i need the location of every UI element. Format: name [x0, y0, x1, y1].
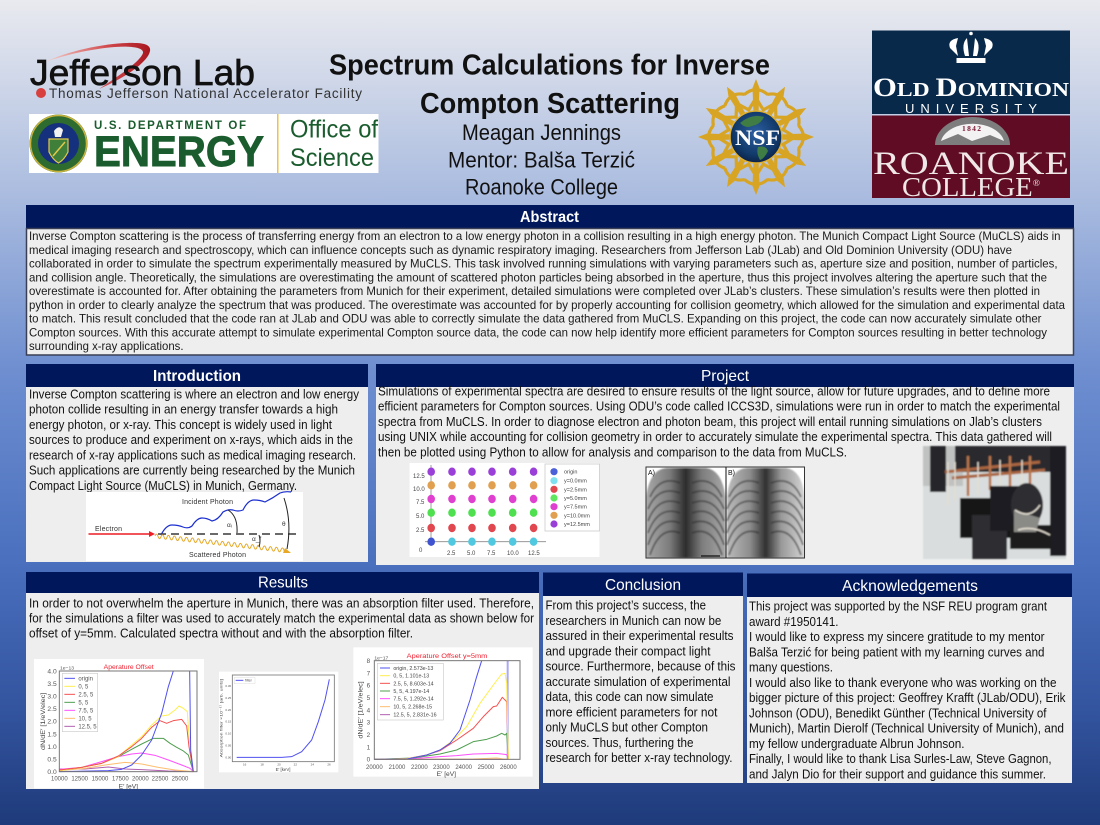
chart: absorption filter: 0.10	[225, 732, 231, 736]
conclusion text: assured in their experimental results	[546, 628, 734, 643]
chart: aperture offset spectrum	[34, 659, 204, 790]
acknowledgements text: bigger picture of this project: Geoffrey Krafft (JLab/ODU), Erik	[749, 690, 1066, 705]
chart: absorption filter: E′ [keV]	[276, 767, 290, 772]
conclusion text: source. Furthermore, because of this	[546, 659, 736, 674]
chart: aperture offset spectrum: 3.0	[47, 694, 57, 701]
chart: aperture offset y=5mm spectrum: 24000	[455, 765, 473, 771]
logo: Roanoke College: ROANOKE	[873, 146, 1069, 182]
abstract text: collaborated in order to simulate the spectrum experimentally measured by MuCLS. This task involved running simulations with varying parameters such as, aperture size and position, number of particles,	[29, 256, 1058, 270]
results text: In order to not overwhelm the aperture in Munich, there was an absorption filter used. Therefore,	[29, 596, 534, 610]
chart: aperture position grid	[410, 463, 600, 557]
conclusion text: From this project’s success, the	[546, 598, 706, 612]
chart: aperture position grid: 7.5	[416, 500, 425, 506]
introduction text: Compact Light Source (MuCLS) in Munich, Germany.	[29, 478, 297, 493]
chart: aperture offset spectrum: 15000	[92, 777, 109, 783]
image: chest x-rays A and B: A)	[648, 470, 655, 477]
abstract text: Inverse Compton scattering is the process of transferring energy from an electron to a low energy photon in a collision resulting in a high energy photon. The Munich Compact Light Source (MuCLS) aids in	[29, 229, 1060, 243]
acknowledgements text: I would also like to thank everyone who was working on the	[749, 675, 1056, 690]
logo: Jefferson Lab: Jefferson Lab	[30, 52, 255, 93]
chart: aperture offset y=5mm spectrum: dN/dE′ [1/eV/elec]	[358, 681, 365, 739]
acknowledgements text: Finally, I would like to thank Lisa Surles-Law, Steve Gagnon,	[749, 751, 1052, 766]
chart: absorption filter: 24	[311, 763, 314, 767]
acknowledgements text: Munich), Martin Dierolf (Technical University of Munich), and	[749, 721, 1064, 736]
chart: aperture offset spectrum: 12500	[71, 777, 89, 783]
icon: DOE seal	[30, 114, 88, 172]
panel: results	[26, 572, 539, 790]
acknowledgements text: and Jalyn Dio for their support and guidance this summer.	[749, 766, 1046, 782]
chart: aperture offset y=5mm spectrum: 21000	[389, 765, 406, 771]
chart: aperture offset y=5mm spectrum: 7	[367, 670, 371, 677]
project text	[378, 384, 1060, 460]
logo: NSF	[698, 79, 814, 195]
project text: then be plotted using Python to allow for analysis and comparison to the data from MuCLS.	[378, 444, 847, 460]
chart: aperture position grid: 10.0	[507, 551, 519, 557]
chart: aperture offset spectrum: 3.5	[47, 681, 57, 688]
project heading	[376, 364, 1074, 387]
conclusion heading: Conclusion	[605, 577, 681, 594]
chart: aperture position grid: 10.0	[413, 487, 425, 493]
chart: aperture offset spectrum: 2.5	[47, 706, 57, 713]
diagram: inverse Compton scattering: Electron	[95, 526, 122, 533]
chart legend: origin	[564, 470, 577, 476]
logo: U.S. Department of Energy Office of Science: U.S. DEPARTMENT OF	[94, 120, 246, 132]
conclusion text: and upgrade their compact light	[546, 643, 711, 658]
chart: aperture offset y=5mm spectrum: 25000	[478, 765, 495, 771]
chart: aperture offset y=5mm spectrum: 20000	[366, 765, 383, 771]
introduction text: photon collide resulting in an energy transfer towards a high	[29, 402, 338, 417]
introduction text: Inverse Compton scattering is where an electron and low energy	[29, 386, 359, 402]
chart: aperture offset y=5mm spectrum: 5, 5, 4.197e-14	[393, 689, 429, 695]
chart: aperture offset spectrum: origin	[78, 676, 93, 682]
project heading: Project	[701, 368, 750, 385]
chart: aperture offset y=5mm spectrum: 4	[367, 707, 371, 714]
conclusion text	[546, 598, 736, 765]
chart: aperture position grid: 12.5	[528, 551, 540, 557]
chart: absorption filter: 0.30	[225, 684, 231, 688]
photo: MuCLS light source	[923, 446, 1066, 559]
introduction text: sources to produce and experiment on x-rays, which aids in the	[29, 432, 353, 447]
chart: absorption filter: 0.05	[225, 744, 231, 748]
chart: absorption filter: 0.15	[225, 720, 231, 724]
chart: aperture offset y=5mm spectrum: 3	[367, 720, 371, 727]
chart legend: y=12.5mm	[564, 522, 590, 528]
chart legend: y=0.0mm	[564, 479, 587, 485]
chart: aperture position grid: 12.5	[413, 474, 425, 480]
panel: conclusion	[543, 572, 743, 783]
chart: aperture offset y=5mm spectrum: 0	[367, 757, 371, 764]
panel: project	[376, 364, 1074, 565]
logo: Old Dominion University: OLD DOMINION	[873, 73, 1070, 102]
conclusion text: accurate simulation of experimental	[546, 674, 731, 689]
acknowledgements text	[749, 598, 1066, 782]
chart: absorption filter: filter	[245, 679, 253, 683]
chart: absorption filter: 0.25	[225, 696, 231, 700]
acknowledgements text: I would like to express my sincere gratitude to my mentor	[749, 629, 1045, 644]
chart: aperture offset spectrum: 0.0	[47, 769, 57, 776]
chart: aperture offset spectrum: 1e−13	[60, 665, 74, 671]
chart: absorption filter: 22	[294, 763, 297, 767]
abstract text: surrounding x-ray applications.	[29, 339, 184, 353]
acknowledgements text: Johnson (ODU), Benedikt Günther (Technical University of	[749, 705, 1047, 720]
chart: aperture offset y=5mm spectrum: 12.5, 5, 2.831e-16	[393, 713, 437, 719]
chart: aperture offset spectrum: 2.0	[47, 719, 57, 726]
diagram: inverse Compton scattering: Scattered Photon	[189, 552, 246, 559]
chart: aperture offset spectrum: 12.5, 5	[78, 724, 97, 730]
results heading: Results	[258, 574, 308, 592]
authors: Roanoke College	[465, 174, 618, 200]
title: Compton Scattering	[420, 88, 680, 120]
logo: U.S. Department of Energy Office of Science: Science	[290, 144, 374, 172]
abstract text	[26, 228, 1074, 355]
chart: aperture offset spectrum: 25000	[172, 777, 189, 783]
chart: aperture position grid: 5.0	[416, 514, 425, 520]
chart: aperture offset y=5mm spectrum: origin, 2.573e-13	[393, 666, 433, 672]
chart: aperture offset y=5mm spectrum: Aperature Offset y=5mm	[407, 653, 487, 660]
diagram: inverse Compton scattering: θ	[282, 521, 286, 528]
acknowledgements heading: Acknowledgements	[842, 578, 978, 595]
introduction heading: Introduction	[153, 368, 241, 385]
chart: aperture offset y=5mm spectrum: 10, 5, 2.268e-15	[393, 705, 432, 711]
diagram: inverse Compton scattering	[86, 492, 303, 561]
chart: aperture position grid: 5.0	[467, 551, 476, 557]
introduction text: Such applications are currently being researched by the Munich	[29, 463, 355, 478]
chart legend: y=2.5mm	[564, 487, 587, 493]
chart: aperture offset spectrum: 0.5	[47, 756, 57, 763]
results heading	[26, 572, 539, 593]
acknowledgements text: award #1950141.	[749, 614, 838, 629]
acknowledgements text: This project was supported by the NSF REU program grant	[749, 598, 1047, 614]
logo: Jefferson Lab: Thomas Jefferson National Accelerator Facility	[49, 86, 362, 101]
logo: U.S. Department of Energy Office of Science	[29, 114, 378, 176]
chart: aperture offset y=5mm spectrum: 1	[367, 744, 371, 751]
chart: aperture offset spectrum: 7.5, 5	[78, 708, 94, 714]
conclusion text: researchers in Munich can now be	[546, 613, 721, 628]
acknowledgements heading	[747, 574, 1072, 597]
chart: absorption filter: 0.00	[225, 755, 231, 759]
chart legend: y=5.0mm	[564, 496, 587, 502]
chart: aperture offset y=5mm spectrum: 1e−17	[374, 655, 389, 661]
icon: 1842 dome: 1842	[962, 124, 981, 133]
chart: aperture position grid: 2.5	[416, 528, 425, 534]
title	[329, 50, 770, 120]
chart: aperture offset y=5mm spectrum: 22000	[411, 765, 428, 771]
logo: Roanoke College: ®	[1033, 178, 1040, 188]
authors: Meagan Jennings	[462, 120, 621, 145]
results text: offset of y=5mm. Calculated spectra without and with the absorption filter.	[29, 626, 413, 640]
image: chest x-rays A and B	[646, 467, 804, 558]
chart: aperture offset y=5mm spectrum	[353, 647, 533, 778]
logo: Roanoke College: COLLEGE	[902, 172, 1025, 202]
icon: 1842 dome	[935, 117, 1010, 145]
abstract text: python in order to clearly analyze the spectrum that was produced. The overestimate was accounted for by properly accounting for collision geometry, which allowed for the simulation and experimental data	[29, 298, 1065, 312]
abstract heading	[26, 205, 1074, 228]
chart: aperture offset spectrum: 4.0	[47, 668, 57, 675]
logo: U.S. Department of Energy Office of Science: Office of	[290, 116, 378, 144]
chart legend	[545, 464, 600, 531]
abstract text: to match. This result concluded that the code ran at JLab and ODU was able to correctly simulate the data gathered from MuCLS. Expanding on this project, the code can now accurately simulate other	[29, 312, 1042, 326]
abstract text: Compton sources. With this accurate attempt to simulate experimental Compton source data, the code can now help identify more efficient parameters for Compton sources resulting in better technology	[29, 325, 1047, 339]
panel: introduction	[26, 364, 368, 562]
chart: aperture offset spectrum: 10, 5	[78, 716, 92, 722]
diagram: inverse Compton scattering: αᵢ	[227, 522, 232, 529]
chart: aperture offset spectrum: 1.5	[47, 731, 57, 738]
conclusion text: data, this code can now simulate	[546, 689, 714, 704]
chart: absorption filter: 0.20	[225, 708, 231, 712]
logo: Old Dominion University: UNIVERSITY	[905, 101, 1037, 116]
chart: aperture offset y=5mm spectrum: 0, 5, 1.101e-13	[393, 674, 429, 680]
logo: U.S. Department of Energy Office of Science: ENERGY	[94, 128, 264, 176]
chart: aperture offset y=5mm spectrum: 5	[367, 695, 371, 702]
introduction text	[29, 386, 359, 493]
chart: aperture offset y=5mm spectrum: 7.5, 5, 1.292e-14	[393, 697, 434, 703]
chart: absorption filter: Absorption filter ×10⁻¹⁷ [arb. units]	[218, 679, 223, 757]
logo: NSF: NSF	[735, 125, 780, 150]
conclusion text: only MuCLS but other Compton	[546, 720, 708, 735]
authors: Mentor: Balša Terzić	[448, 148, 635, 172]
chart: aperture position grid: 2.5	[447, 551, 456, 557]
acknowledgements text: my fellow undergraduate Albrun Johnson.	[749, 736, 964, 751]
chart: aperture offset spectrum: 0, 5	[78, 684, 89, 690]
chart: aperture offset y=5mm spectrum: 23000	[433, 765, 450, 771]
chart: aperture offset y=5mm spectrum: 2	[367, 732, 371, 739]
chart: aperture offset spectrum: 2.5, 5	[78, 692, 94, 698]
chart legend: y=10.0mm	[564, 513, 590, 519]
logo: Old Dominion University	[872, 30, 1070, 116]
chart: absorption filter	[218, 672, 338, 772]
chart: aperture offset y=5mm spectrum: 2.5, 5, 8.603e-14	[393, 681, 434, 687]
introduction text: energy photon, or x-ray. This concept is widely used in light	[29, 417, 332, 432]
chart: aperture offset spectrum: 17500	[112, 777, 129, 783]
chart: aperture position grid: 7.5	[487, 551, 496, 557]
chart: aperture offset spectrum: Aperature Offset	[104, 664, 154, 671]
logo: Jefferson Lab	[30, 43, 362, 101]
chart legend: y=7.5mm	[564, 505, 587, 511]
conclusion text: research for better x-ray technology.	[546, 750, 732, 765]
chart: aperture offset spectrum: 10000	[51, 777, 68, 783]
authors	[448, 120, 635, 200]
results text	[29, 596, 535, 640]
chart: absorption filter: 18	[260, 763, 264, 767]
chart: aperture offset y=5mm spectrum: 6	[367, 683, 371, 690]
panel: abstract	[26, 205, 1074, 355]
conclusion text: more efficient parameters for not	[546, 704, 718, 719]
abstract text: and collision angle. Theoretically, the simulations are overestimating the amount of scattered photon particles being absorbed in the aperture, thus this project involves altering the aperture such that the	[29, 270, 1047, 284]
acknowledgements text: Balša Terzić for being patient with my learning curves and	[749, 644, 1044, 659]
chart: absorption filter: 16	[243, 763, 247, 767]
chart: aperture offset spectrum: 22500	[152, 777, 169, 783]
chart: aperture offset spectrum: 1.0	[47, 744, 57, 751]
abstract text: overestimate is accounted for. After obtaining the parameters from Munich for their experiment, detailed simulations were completed over JLab’s clusters. These simulation’s results were then plotted in	[29, 284, 1040, 298]
chart: aperture offset y=5mm spectrum: 26000	[500, 765, 517, 771]
conclusion heading	[543, 572, 743, 596]
chart: aperture offset spectrum: E′ [eV]	[119, 783, 138, 790]
chart: absorption filter: 20	[277, 763, 281, 767]
results text: for the simulations a filter was used to accurately match the experimental data as shown below for	[29, 610, 535, 626]
chart: aperture offset spectrum: 20000	[132, 777, 149, 783]
conclusion text: sources. Thus, furthering the	[546, 735, 694, 750]
diagram: inverse Compton scattering: Incident Photon	[182, 499, 233, 506]
image: chest x-rays A and B: B)	[728, 470, 735, 477]
diagram: inverse Compton scattering: α_f	[252, 536, 261, 543]
logo: Roanoke College	[872, 116, 1070, 202]
panel: acknowledgements	[747, 574, 1072, 783]
introduction heading	[26, 364, 368, 387]
chart: aperture position grid: 0	[419, 548, 423, 554]
introduction text: research of x-ray applications such as medical imaging research.	[29, 447, 356, 462]
abstract heading: Abstract	[520, 209, 580, 226]
chart: aperture offset y=5mm spectrum: E′ [eV]	[437, 771, 456, 778]
title: Spectrum Calculations for Inverse	[329, 50, 770, 82]
acknowledgements text: many questions.	[749, 660, 833, 675]
chart: aperture offset y=5mm spectrum: 8	[367, 658, 371, 665]
abstract text: medical imaging research and spectroscopy, which can influence concepts such as dynamic respiratory imaging. Researchers from Jefferson Lab (JLab) and Old Dominion University (ODU) have	[29, 243, 1012, 257]
chart: absorption filter: 26	[327, 763, 331, 767]
icon: crown	[949, 32, 993, 63]
chart: aperture offset spectrum: 5, 5	[78, 700, 89, 706]
chart: aperture offset spectrum: dN/dE′ [1/eV/elec]	[40, 692, 47, 750]
